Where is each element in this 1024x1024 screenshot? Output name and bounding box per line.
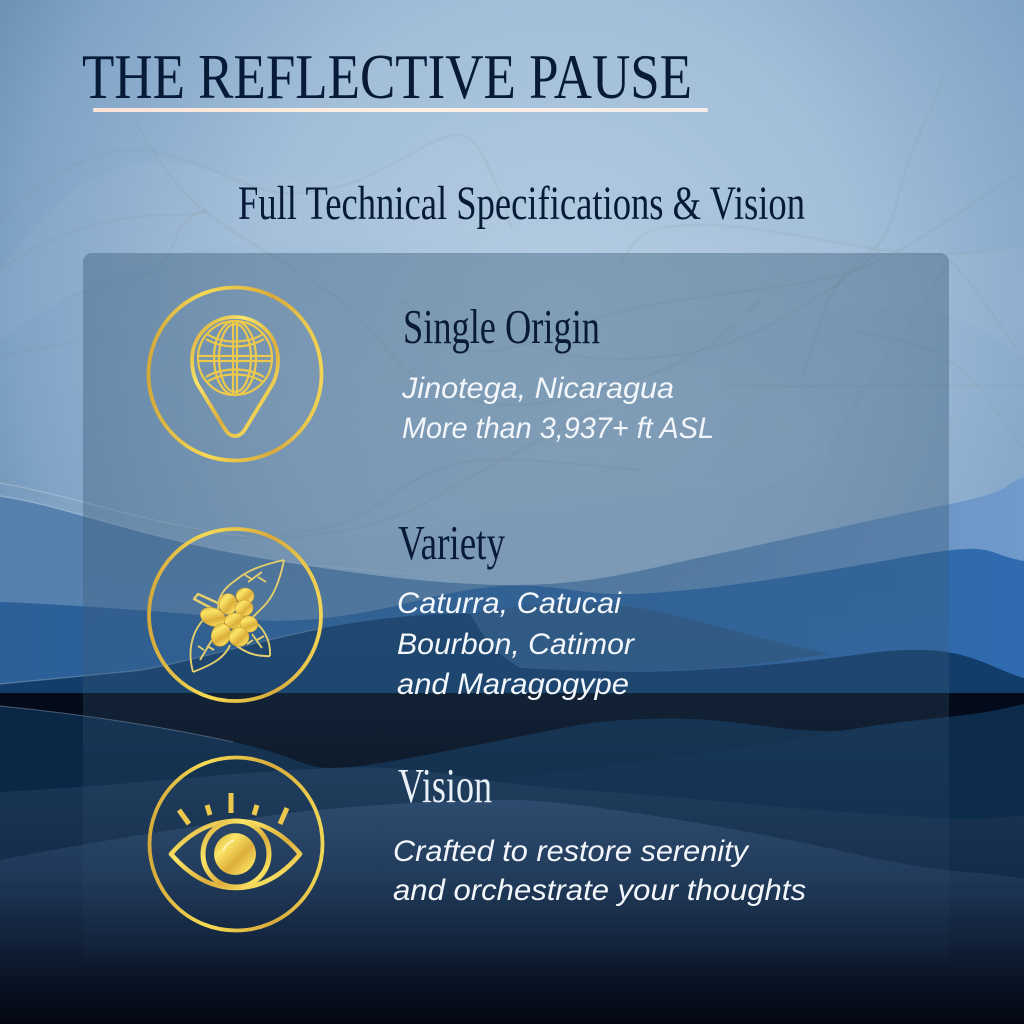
text: vision details: Crafted to restore serenity: [393, 835, 750, 868]
text: origin details: [401, 372, 714, 445]
text: variety details: Caturra, Catucai: [397, 587, 622, 620]
text: origin details: More than 3,937+ ft ASL: [402, 412, 714, 445]
text: origin details: Jinotega, Nicaragua: [401, 372, 674, 405]
icon: eye: [150, 758, 322, 930]
icon: coffee branch: [149, 529, 321, 701]
translucent panel: [83, 253, 949, 963]
text: variety details: and Maragogype: [397, 668, 629, 701]
heading: Variety: Variety: [398, 515, 505, 570]
title underline: [93, 108, 708, 112]
heading: Single Origin: Single Origin: [403, 299, 600, 354]
icon: globe location pin: [148, 288, 322, 460]
text: vision details: and orchestrate your thoughts: [393, 874, 806, 907]
text: vision details: [393, 835, 806, 907]
text: variety details: [397, 587, 635, 701]
heading: Vision: Vision: [398, 758, 492, 813]
subtitle: Full Technical Specifications & Vision: [238, 177, 805, 230]
title: THE REFLECTIVE PAUSE: [82, 42, 692, 112]
text: variety details: Bourbon, Catimor: [397, 628, 635, 661]
